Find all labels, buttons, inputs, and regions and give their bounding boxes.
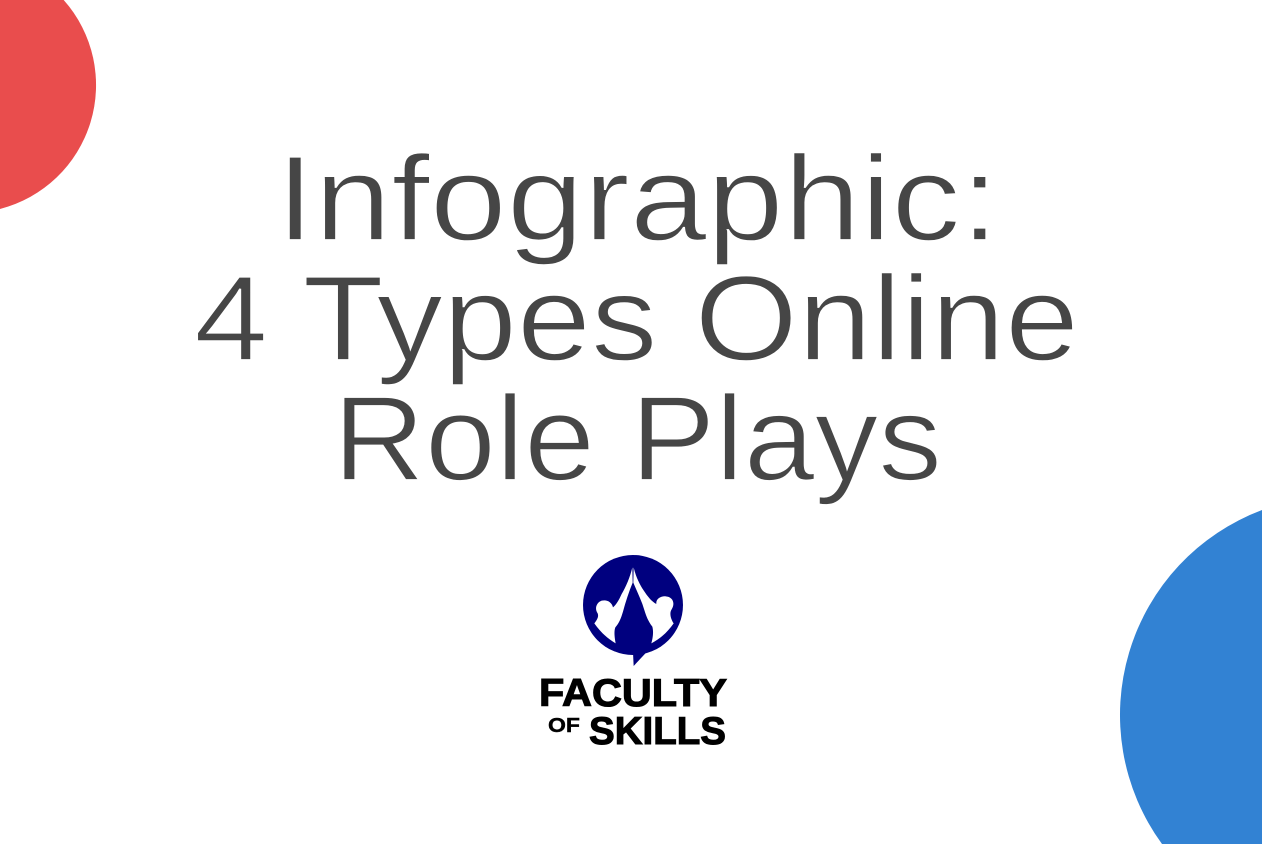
title [194, 130, 1079, 506]
logo wordmark: SKILLS [589, 710, 726, 753]
logo icon: speech bubble with two figures high-fiving [583, 555, 683, 666]
logo: Faculty of Skills [539, 555, 727, 753]
logo wordmark: FACULTY [539, 672, 727, 715]
logo wordmark [539, 672, 727, 753]
logo wordmark: OF [548, 715, 580, 737]
decorative red circle, top left [0, 0, 96, 209]
decorative blue circle, bottom right [1120, 510, 1262, 844]
title: 4 Types Online [194, 250, 1079, 386]
title: Role Plays [333, 370, 942, 506]
title: Infographic: [276, 130, 999, 266]
